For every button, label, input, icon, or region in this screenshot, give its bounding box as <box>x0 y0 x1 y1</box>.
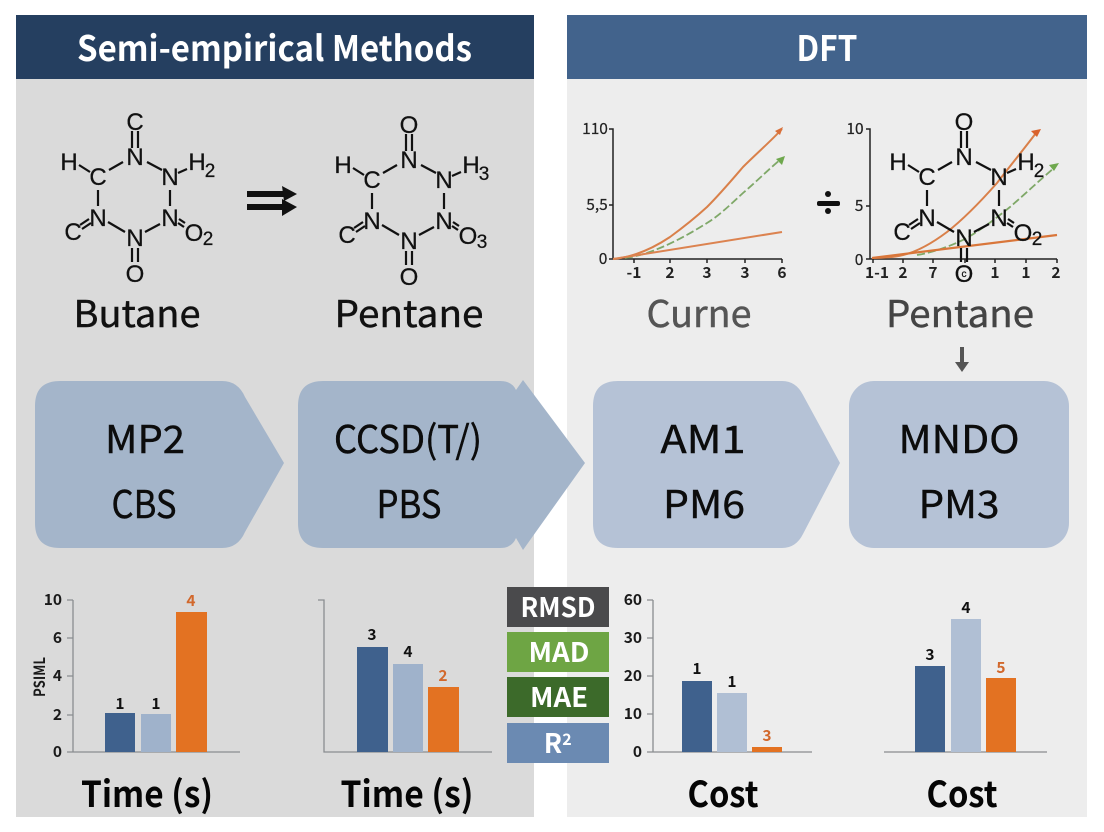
molecule: overlay structure: N <box>990 164 1008 191</box>
icon: divide sign <box>817 191 840 214</box>
flow box: MNDO PM3: MNDO <box>898 409 1020 464</box>
bar chart: time right: 4 <box>403 640 413 662</box>
chip: MAE <box>507 676 609 717</box>
molecule: overlay structure: N <box>990 205 1008 232</box>
line chart with molecule overlay: 1 <box>990 261 1000 283</box>
bar chart: time left: 2 <box>53 703 62 725</box>
chip: MAE: MAE <box>530 676 588 715</box>
axis title: time right: Time (s) <box>340 766 474 818</box>
molecule: pentane structure: N <box>400 147 418 174</box>
bar chart: time left: 4 <box>186 589 196 611</box>
chip: MAD: MAD <box>528 631 590 670</box>
line chart with molecule overlay: 0 <box>855 248 863 270</box>
bar chart: time left: 10 <box>44 588 62 610</box>
molecule: pentane structure: 3 <box>479 164 489 185</box>
molecule: overlay structure: c <box>962 269 966 280</box>
molecule: overlay structure: N <box>918 205 936 232</box>
molecule: butane structure: N <box>161 205 179 232</box>
bar chart: time left: 0 <box>53 740 62 762</box>
molecule: pentane structure: 3 <box>477 232 487 253</box>
molecule: overlay structure: O <box>1014 220 1032 247</box>
heading: DFT <box>567 15 1087 79</box>
line chart with molecule overlay: 2 <box>1051 261 1061 283</box>
molecule: overlay structure: H <box>889 149 907 176</box>
flow box: MNDO PM3 <box>849 381 1069 548</box>
line chart: curve: -1 <box>627 261 641 283</box>
panel: semi-empirical background <box>16 79 534 817</box>
chip: MAD <box>507 631 609 672</box>
line chart with molecule overlay: 10 <box>846 117 864 139</box>
bar chart: time right: 3 <box>367 623 377 645</box>
heading: DFT: DFT <box>796 21 858 72</box>
bar chart: cost left <box>624 588 812 762</box>
bar chart: time left: 1 <box>151 692 161 714</box>
axis title: time left: Time (s) <box>81 766 213 818</box>
molecule: butane structure: C <box>89 164 107 191</box>
flow box: AM1 PM6: AM1 <box>660 409 746 464</box>
line chart: curve: 3 <box>702 261 712 283</box>
bar chart: cost left: 1 <box>692 657 702 679</box>
molecule: pentane structure: C <box>363 167 381 194</box>
bar chart: time left: 4 <box>53 664 62 686</box>
flow box: CCSD(T/) PBS: CCSD(T/) <box>334 409 482 464</box>
flow box: CCSD(T/) PBS <box>298 380 585 550</box>
bar chart: time left: 1 <box>115 692 125 714</box>
line chart with molecule overlay: 1 <box>1021 261 1031 283</box>
bar chart: cost right <box>884 596 1047 752</box>
axis title: cost left: Cost <box>688 766 758 818</box>
bar chart: time right: 2 <box>438 664 448 686</box>
line chart: curve: 110 <box>582 117 608 139</box>
molecule: butane structure: 2 <box>205 161 215 182</box>
line chart: curve <box>582 117 787 283</box>
label: pentane: Pentane <box>334 284 484 338</box>
heading: semi-empirical methods: Semi-empirical Methods <box>77 21 472 72</box>
molecule: pentane structure: O <box>400 264 418 291</box>
line chart: curve: 2 <box>665 261 675 283</box>
molecule: overlay structure: 2 <box>1032 229 1042 250</box>
molecule: butane structure: N <box>126 144 144 171</box>
bar chart: time left <box>28 588 240 762</box>
flow box: MP2 CBS <box>35 381 284 548</box>
molecule: butane structure: C <box>64 219 82 246</box>
molecule: overlay structure: O <box>955 109 973 136</box>
line chart with molecule overlay: 1-1 <box>865 261 889 283</box>
molecule: overlay structure: O <box>955 261 973 288</box>
molecule: butane structure: O <box>126 261 144 288</box>
molecule: butane structure <box>60 109 215 288</box>
molecule: pentane structure: N <box>363 208 381 235</box>
bar chart: time left: 6 <box>53 626 62 648</box>
molecule: pentane structure: C <box>338 222 356 249</box>
bar chart: cost left: 1 <box>727 670 737 692</box>
flow box: MP2 CBS: CBS <box>112 474 176 529</box>
bar chart: cost right: 4 <box>961 596 971 618</box>
molecule: butane structure: H <box>188 149 206 176</box>
bar chart: cost left: 10 <box>624 702 642 724</box>
molecule: pentane structure: O <box>400 112 418 139</box>
molecule: butane structure: C <box>126 109 144 136</box>
molecule: overlay structure: N <box>955 144 973 171</box>
line chart: curve: 3 <box>740 261 750 283</box>
molecule: butane structure: 2 <box>203 229 213 250</box>
chip: R squared: R <box>544 722 562 761</box>
line chart with molecule overlay <box>846 117 1061 283</box>
molecule: overlay structure: C <box>893 219 911 246</box>
molecule: overlay structure: C <box>918 164 936 191</box>
line chart: curve: 5,5 <box>586 193 608 215</box>
molecule: overlay structure: H <box>1017 149 1035 176</box>
flow box: AM1 PM6: PM6 <box>663 474 745 529</box>
molecule: overlay structure <box>889 109 1044 288</box>
molecule: pentane structure: N <box>400 228 418 255</box>
bar chart: cost left: 0 <box>633 740 642 762</box>
flow box: AM1 PM6 <box>593 381 840 548</box>
flow box: MNDO PM3: PM3 <box>918 474 1000 529</box>
molecule: butane structure: O <box>185 220 203 247</box>
label: butane: Butane <box>74 284 200 338</box>
line chart with molecule overlay: 2 <box>898 261 908 283</box>
molecule: pentane structure <box>334 112 489 291</box>
molecule: pentane structure: N <box>435 208 453 235</box>
molecule: pentane structure: N <box>435 167 453 194</box>
molecule: butane structure: N <box>126 225 144 252</box>
bar chart: cost right: 3 <box>925 643 935 665</box>
label: pentane right: Pentane <box>886 284 1034 338</box>
bar chart: cost right: 5 <box>996 656 1006 678</box>
molecule: pentane structure: H <box>334 152 352 179</box>
line chart: curve: 6 <box>777 261 787 283</box>
molecule: pentane structure: O <box>459 223 477 250</box>
bar chart: cost left: 60 <box>624 588 642 610</box>
bar chart: cost left: 3 <box>762 724 772 746</box>
heading: semi-empirical methods <box>16 15 534 79</box>
arrow: double reaction arrow <box>247 186 297 216</box>
molecule: pentane structure: H <box>462 152 480 179</box>
line chart with molecule overlay: 7 <box>928 261 938 283</box>
bar chart: cost left: 20 <box>624 664 642 686</box>
bar chart: time left: PSIML <box>28 657 50 697</box>
arrow: down arrow <box>955 347 969 372</box>
chip: RMSD: RMSD <box>520 586 596 625</box>
legend: metric chips <box>507 586 609 763</box>
bar chart: cost left: 30 <box>624 626 642 648</box>
molecule: butane structure: N <box>161 164 179 191</box>
line chart with molecule overlay: 5 <box>855 194 863 216</box>
line chart: curve: 0 <box>599 247 607 269</box>
flow box: MP2 CBS: MP2 <box>105 409 185 464</box>
molecule: overlay structure: N <box>955 225 973 252</box>
molecule: butane structure: N <box>89 205 107 232</box>
label: curne: Curne <box>646 284 752 338</box>
bar chart: time right <box>318 600 492 752</box>
chip: R squared: 2 <box>562 726 572 750</box>
flow box: CCSD(T/) PBS: PBS <box>376 474 442 529</box>
chip: R squared <box>507 722 609 763</box>
axis title: cost right: Cost <box>926 766 998 818</box>
panel: DFT background <box>567 79 1087 817</box>
molecule: overlay structure: 2 <box>1034 161 1044 182</box>
molecule: butane structure: H <box>60 149 78 176</box>
